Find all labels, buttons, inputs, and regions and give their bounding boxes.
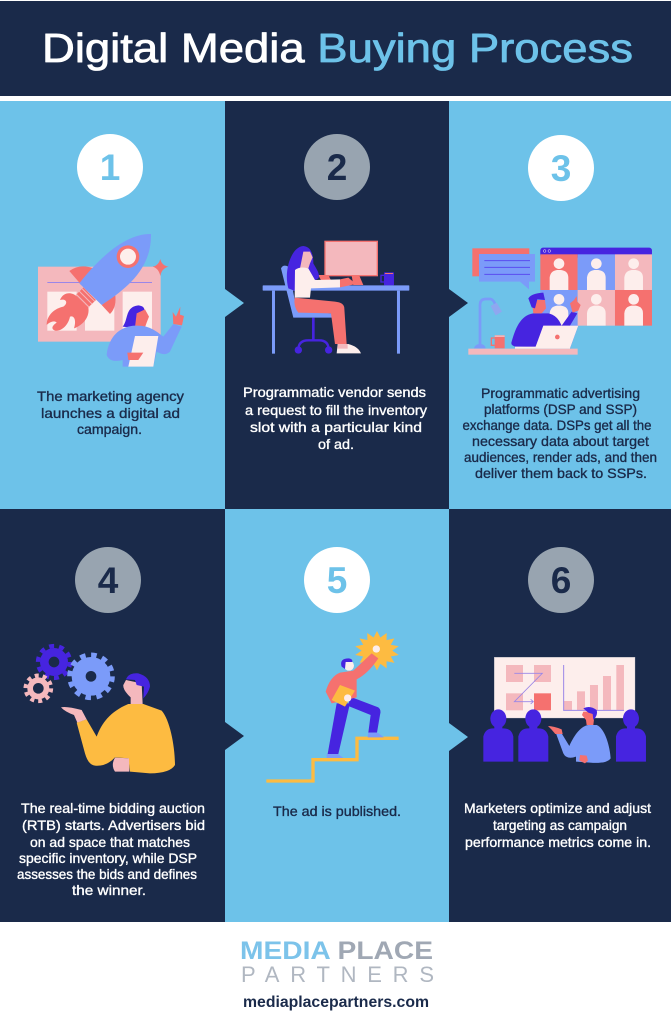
logo: Media Place Partners <box>240 937 434 987</box>
panel: step 5 <box>225 509 449 922</box>
arrow: step 4 to 5 <box>225 722 244 750</box>
step 1 text: The marketing agency <box>37 388 184 404</box>
number badge 1: 1 <box>100 147 120 188</box>
step 3 text <box>462 385 657 481</box>
panel: step 1 <box>0 101 225 509</box>
step 2 text: of ad. <box>318 436 354 452</box>
step 1 text: campaign. <box>77 421 142 437</box>
step 4 text: specific inventory, while DSP <box>19 850 197 866</box>
arrow: step 5 to 6 <box>449 723 468 751</box>
number badge 4 <box>75 547 141 613</box>
number badge 3 <box>528 135 594 201</box>
illustration: woman at desk with computer <box>263 241 409 354</box>
step 2 text <box>243 384 427 452</box>
step 1 text <box>37 388 184 437</box>
header band <box>0 1 671 96</box>
number badge 6: 6 <box>551 560 571 601</box>
step 6 text: performance metrics come in. <box>465 834 651 850</box>
illustration: man presenting gears <box>26 646 175 773</box>
step 2 text: slot with a particular kind <box>250 419 422 435</box>
number badge 1 <box>77 134 143 200</box>
title: Digital Media Buying Process <box>42 25 633 71</box>
step 2 text: Programmatic vendor sends <box>243 384 426 400</box>
logo: Media Place Partners: MEDIA PLACE <box>240 937 433 965</box>
step 3 text: Programmatic advertising <box>481 385 640 401</box>
step 1 text: launches a digital ad <box>41 405 180 421</box>
step 4 text: the winner. <box>72 882 146 898</box>
number badge 4: 4 <box>98 560 119 601</box>
number badge 5: 5 <box>327 560 347 601</box>
number badge 3: 3 <box>551 148 571 189</box>
panel: step 4 <box>0 509 225 922</box>
step 3 text: deliver them back to SSPs. <box>475 465 647 481</box>
step 4 text <box>17 800 205 898</box>
step 6 text: targeting as campaign <box>493 817 627 833</box>
step 3 text: exchange data. DSPs get all the <box>462 417 652 433</box>
panel: step 6 <box>449 509 671 922</box>
illustration: man on video call with grid of participants <box>468 248 652 355</box>
illustration: audience watching presenter at chart board <box>483 657 646 763</box>
panel: step 2 <box>225 101 449 509</box>
number badge 2: 2 <box>327 147 347 188</box>
arrow: step 2 to 3 <box>449 289 468 317</box>
logo: Media Place Partners: PARTNERS <box>241 962 434 987</box>
arrow: step 1 to 2 <box>225 289 244 317</box>
step 4 text: on ad space that matches <box>30 834 190 850</box>
step 3 text: necessary data about target <box>472 433 649 449</box>
step 3 text: audiences, render ads, and then <box>464 449 657 465</box>
website url: mediaplacepartners.com <box>243 994 429 1011</box>
number badge 2 <box>304 134 370 200</box>
illustration: rocket launch and woman with clipboard <box>38 234 184 367</box>
number badge 5 <box>304 547 370 613</box>
panel: step 3 <box>449 101 671 509</box>
step 5 text: The ad is published. <box>273 803 401 819</box>
step 2 text: a request to fill the inventory <box>245 402 427 418</box>
step 3 text: platforms (DSP and SSP) <box>484 401 637 417</box>
step 6 text <box>464 800 651 850</box>
number badge 6 <box>528 547 594 613</box>
illustration: man climbing stairs to reach a sun <box>266 631 399 781</box>
step 6 text: Marketers optimize and adjust <box>464 800 651 816</box>
step 4 text: The real-time bidding auction <box>21 800 205 816</box>
step 4 text: assesses the bids and defines <box>17 866 197 882</box>
step 4 text: (RTB) starts. Advertisers bid <box>22 817 205 833</box>
